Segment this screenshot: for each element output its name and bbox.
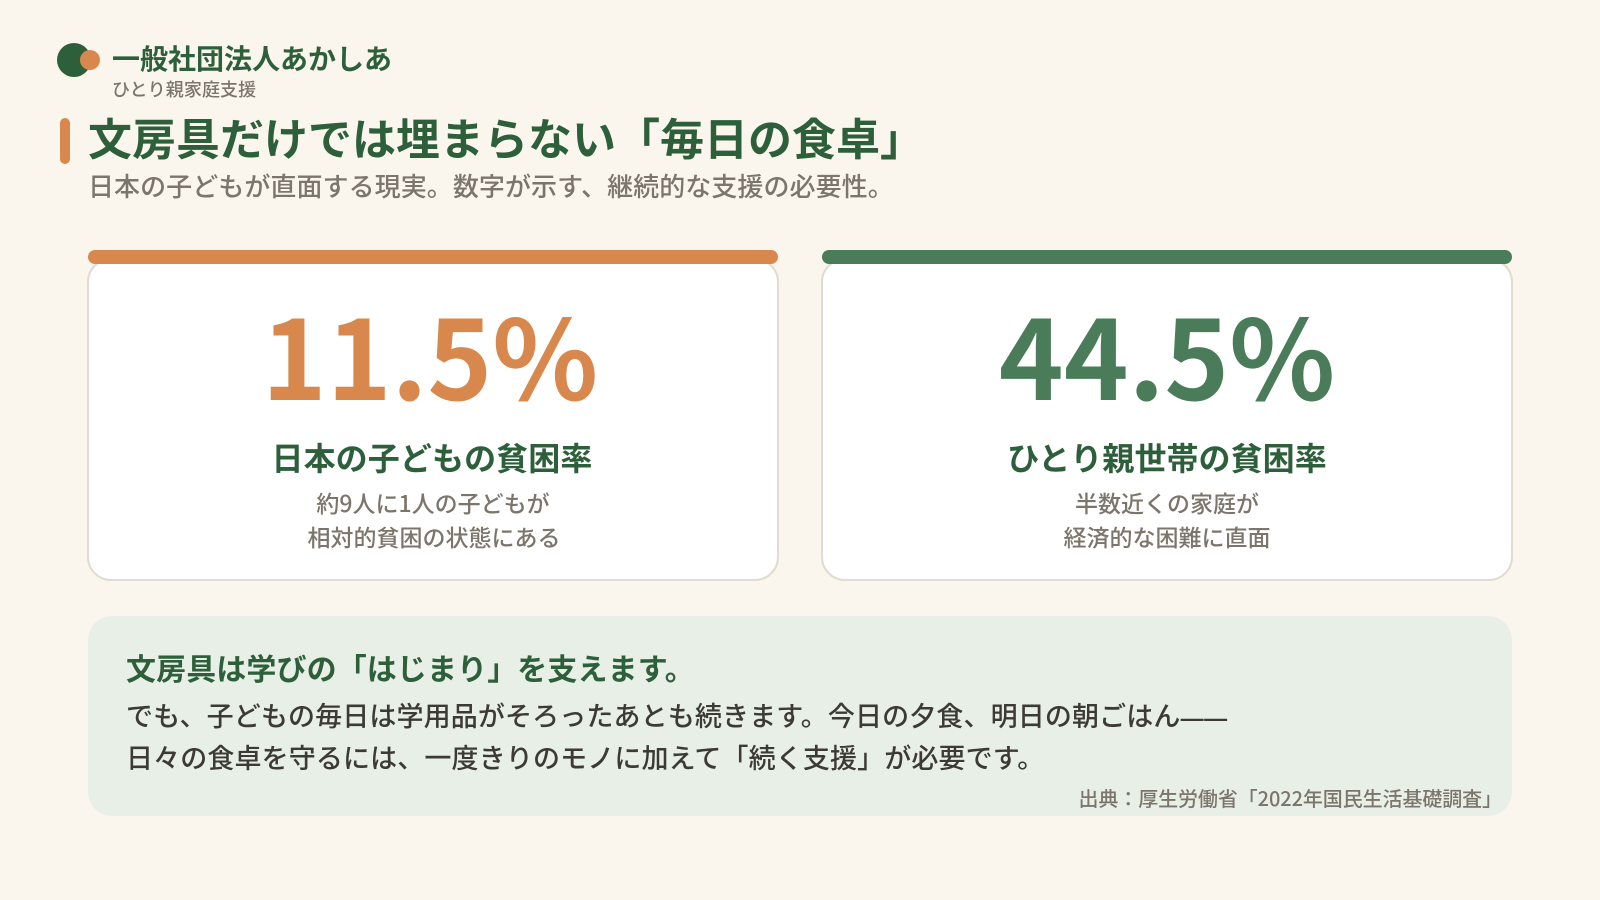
card background (87, 258, 779, 581)
callout body: でも、子どもの毎日は学用品がそろったあとも続きます。今日の夕食、明日の朝ごはん—— (126, 695, 1228, 734)
stat label: ひとり親世帯の貧困率 (1007, 434, 1327, 480)
stat value: 44.5% (999, 272, 1335, 432)
stat description (1064, 485, 1270, 553)
callout body: 日々の食卓を守るには、一度きりのモノに加えて「続く支援」が必要です。 (126, 737, 1044, 776)
subtitle: 日本の子どもが直面する現実。数字が示す、継続的な支援の必要性。 (88, 167, 894, 204)
callout heading: 文房具は学びの「はじまり」を支えます。 (126, 645, 695, 689)
panel: single-parent poverty rate (821, 250, 1513, 581)
stat description: 半数近くの家庭が (1075, 485, 1259, 519)
stat label: 日本の子どもの貧困率 (271, 434, 592, 480)
source note: 出典：厚生労働省「2022年国民生活基礎調査」 (1078, 783, 1502, 812)
stat description: 約9人に1人の子どもが (316, 485, 550, 519)
logo (57, 43, 100, 77)
card background (821, 258, 1513, 581)
callout body (126, 695, 1228, 776)
title accent bar (60, 118, 70, 164)
logo: small orange circle (80, 50, 100, 70)
stat description: 経済的な困難に直面 (1064, 519, 1270, 553)
panel: message callout (88, 616, 1512, 816)
stat value: 11.5% (262, 272, 598, 432)
organisation name: 一般社団法人あかしあ (112, 38, 392, 78)
panel: child poverty rate (87, 250, 779, 581)
logo: large green circle (57, 43, 91, 77)
card top bar (822, 250, 1512, 264)
card top bar (88, 250, 778, 264)
stat description (308, 485, 560, 553)
organisation tagline: ひとり親家庭支援 (112, 76, 256, 102)
stat description: 相対的貧困の状態にある (308, 519, 560, 553)
title: 文房具だけでは埋まらない「毎日の食卓」 (88, 104, 924, 168)
